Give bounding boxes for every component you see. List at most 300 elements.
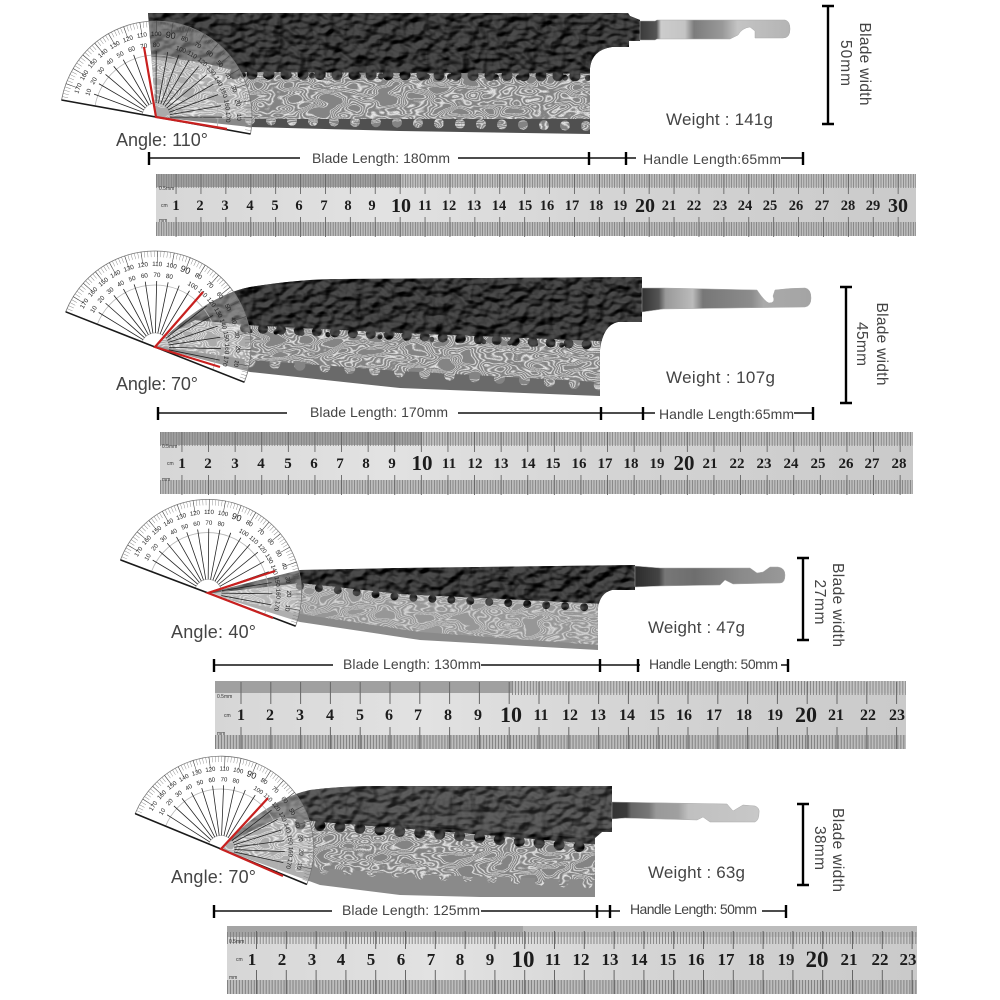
ruler 4: cm	[236, 957, 243, 963]
angle label 1: Angle: 110°	[116, 130, 208, 150]
blade width dimension 1: Blade width	[856, 22, 873, 106]
ruler 1: 17	[565, 198, 579, 214]
angle marker 4	[221, 798, 283, 876]
protractor 4: 40	[184, 783, 194, 792]
ruler 3: 10	[500, 702, 522, 727]
protractor 1: 130	[109, 40, 122, 51]
protractor 2: 50	[128, 275, 137, 284]
protractor 3: 140	[162, 517, 175, 528]
ruler 3: 2	[266, 707, 274, 724]
protractor 4: 50	[196, 779, 205, 787]
ruler 2: 26	[838, 456, 854, 472]
protractor 2	[66, 222, 280, 382]
protractor 2: 60	[140, 272, 149, 280]
ruler 4: 5	[367, 950, 375, 969]
protractor 3: 130	[263, 553, 275, 566]
protractor 4: 50	[287, 807, 297, 817]
protractor 4: 90	[245, 768, 258, 781]
ruler 2: mm	[162, 477, 170, 483]
protractor 1: 20	[233, 99, 241, 107]
protractor 4: 130	[277, 811, 288, 824]
protractor 3: 80	[244, 519, 254, 529]
ruler 4: 7	[427, 950, 436, 969]
protractor 2: 140	[109, 269, 122, 280]
protractor 4: 80	[232, 777, 241, 786]
protractor 3: 50	[181, 523, 190, 532]
protractor 1: 90	[165, 30, 177, 41]
blade length dimension 4	[214, 902, 786, 918]
protractor 1: 170	[73, 82, 84, 95]
blade width dimension 3: Blade width	[829, 563, 846, 647]
blade width dimension 1	[822, 6, 873, 124]
protractor 4: 30	[296, 835, 304, 843]
protractor 2: 10	[232, 359, 240, 368]
weight 4: Weight : 63g	[648, 863, 745, 882]
handle length label 4: Handle Length: 50mm	[630, 901, 757, 917]
protractor 2: 40	[116, 279, 126, 289]
blade width dimension 4: 38mm	[811, 826, 828, 870]
protractor 3: 120	[189, 509, 201, 518]
ruler 1: cm	[161, 203, 168, 209]
tang 2	[642, 288, 811, 312]
protractor 2: 160	[87, 286, 100, 299]
protractor 2: 110	[152, 261, 163, 268]
protractor 1: 60	[204, 49, 215, 59]
ruler 4: 1	[248, 950, 256, 969]
blade width dimension 4: Blade width	[829, 808, 846, 892]
protractor 4: 110	[219, 766, 230, 773]
protractor 1: 110	[186, 50, 198, 61]
ruler 3: 23	[889, 707, 905, 724]
ruler 1: 19	[613, 198, 627, 214]
protractor 1: 150	[87, 57, 99, 70]
handle length label 3: Handle Length: 50mm	[649, 656, 778, 672]
ruler 1: 20	[635, 195, 655, 217]
protractor 2: 20	[234, 346, 241, 353]
protractor 1: 170	[224, 112, 231, 123]
ruler 2: 10	[412, 451, 432, 475]
protractor 3: 30	[283, 576, 292, 585]
ruler 3: 21	[828, 707, 844, 724]
blade 1	[148, 13, 640, 134]
protractor 3: 110	[204, 509, 214, 516]
ruler 4: 10	[512, 947, 534, 972]
ruler 2: 4	[257, 456, 265, 472]
protractor 1: 60	[127, 45, 137, 54]
ruler 2: 11	[442, 456, 456, 472]
ruler 4: 20	[806, 947, 828, 972]
protractor 4: 20	[165, 797, 175, 807]
angle marker 1	[144, 47, 227, 129]
ruler 3: 18	[736, 707, 752, 724]
protractor 3	[120, 472, 329, 626]
ruler 1: 30	[888, 195, 908, 217]
ruler 3: 20	[795, 702, 817, 727]
ruler 3: 4	[326, 707, 334, 724]
ruler 4: 4	[337, 950, 346, 969]
panel: knife 1	[62, 6, 916, 236]
ruler 2: 5	[284, 456, 292, 472]
protractor 2: 20	[97, 294, 107, 305]
ruler 2: 7	[336, 456, 344, 472]
protractor 2: 140	[218, 318, 228, 331]
ruler 1: 24	[738, 198, 752, 214]
protractor 2: 160	[223, 344, 230, 355]
protractor 2: 60	[215, 291, 225, 301]
protractor 2: 130	[123, 264, 135, 274]
protractor 2: 70	[205, 280, 215, 290]
ruler 3: 3	[296, 707, 304, 724]
protractor 4: 60	[208, 776, 216, 784]
ruler 2: 18	[624, 456, 638, 472]
ruler 1: 25	[763, 198, 777, 214]
ruler 4: 8	[456, 950, 464, 969]
protractor 2: 120	[137, 261, 149, 270]
protractor 2: 110	[196, 287, 209, 300]
protractor 1	[62, 6, 267, 134]
protractor 1: 120	[196, 56, 209, 69]
protractor 3: 30	[159, 534, 169, 544]
ruler 1: 21	[662, 198, 676, 214]
protractor 4: 10	[158, 807, 168, 817]
blade 4	[223, 786, 612, 897]
ruler 1: 10	[391, 195, 411, 217]
ruler 3: 19	[767, 707, 783, 724]
protractor 4: 20	[297, 849, 304, 856]
angle marker 2	[155, 292, 220, 367]
protractor 1: 30	[229, 85, 238, 94]
ruler 2: 0.5mm	[162, 444, 177, 450]
angle marker 3	[208, 571, 275, 618]
protractor 1: 70	[193, 41, 203, 51]
ruler 4: 14	[630, 950, 648, 969]
protractor 4: 140	[178, 773, 191, 784]
ruler 1: 15	[518, 198, 532, 214]
ruler 3: 9	[474, 707, 482, 724]
protractor 1: 10	[235, 114, 242, 121]
protractor 1: 30	[96, 66, 107, 76]
weight 2: Weight : 107g	[666, 368, 775, 387]
ruler 2: 22	[730, 456, 744, 472]
protractor 2: 50	[223, 303, 232, 313]
protractor 4: 40	[293, 821, 302, 830]
protractor 2: 90	[179, 263, 192, 276]
ruler 2: 19	[650, 456, 664, 472]
ruler 2: 1	[178, 456, 186, 472]
handle length label 1: Handle Length:65mm	[643, 151, 781, 167]
panel: knife 2	[66, 222, 913, 494]
ruler 4: 16	[688, 950, 704, 969]
ruler 1: 23	[713, 198, 727, 214]
protractor 3: 160	[141, 534, 153, 547]
ruler 2: 20	[674, 451, 694, 475]
ruler 4: 12	[572, 950, 590, 969]
protractor 1: 80	[153, 42, 160, 49]
protractor 3: 70	[205, 520, 213, 527]
protractor 4: 170	[284, 858, 293, 870]
ruler 4: 9	[486, 950, 494, 969]
handle length label 2: Handle Length:65mm	[659, 406, 794, 422]
blade width dimension 4	[797, 804, 846, 892]
ruler 2: 28	[892, 456, 906, 472]
protractor 2: 100	[166, 262, 178, 271]
protractor 4: 160	[156, 789, 168, 801]
ruler 2: 17	[598, 456, 613, 472]
protractor 2: 170	[79, 297, 91, 310]
ruler 2: 9	[388, 456, 396, 472]
blade 3	[211, 565, 635, 650]
protractor 3: 150	[151, 524, 164, 537]
protractor 2: 40	[229, 316, 238, 326]
ruler 1: 29	[866, 198, 880, 214]
blade length dimension 2	[158, 404, 813, 420]
protractor 1: 140	[212, 75, 224, 88]
ruler 2: 6	[310, 456, 318, 472]
ruler 3: 16	[676, 707, 692, 724]
ruler 1: 28	[841, 198, 855, 214]
blade width dimension 3: 27mm	[811, 580, 828, 624]
ruler 4: 15	[660, 950, 676, 969]
protractor 3: 170	[133, 545, 145, 558]
weight 1: Weight : 141g	[666, 110, 773, 129]
ruler 3: cm	[224, 713, 231, 719]
protractor 4: 120	[205, 766, 217, 774]
blade width dimension 3	[797, 558, 846, 647]
protractor 2: 130	[212, 307, 224, 320]
protractor 1: 140	[97, 47, 110, 60]
protractor 1: 160	[222, 99, 231, 111]
protractor 2: 70	[153, 272, 161, 279]
protractor 3: 140	[269, 564, 279, 576]
protractor 4: 70	[270, 785, 280, 795]
blade width dimension 2: Blade width	[873, 302, 890, 386]
protractor 4: 130	[191, 768, 203, 778]
ruler 2: 8	[362, 456, 370, 472]
blade 2	[157, 277, 642, 396]
ruler 1: mm	[159, 218, 167, 224]
protractor 3: 120	[256, 543, 268, 555]
protractor 2: 10	[89, 304, 99, 314]
ruler 1: 26	[789, 198, 803, 214]
blade length dimension 1	[149, 150, 803, 166]
blade length dimension 2: Blade Length: 170mm	[310, 404, 448, 420]
protractor 3: 170	[272, 600, 281, 612]
tang 3	[635, 566, 785, 587]
blade width dimension 2	[840, 287, 890, 403]
protractor 3: 160	[274, 589, 281, 600]
ruler 4: 2	[278, 950, 286, 969]
protractor 3: 40	[169, 527, 179, 537]
protractor 3: 90	[230, 511, 243, 524]
protractor 3: 100	[237, 527, 250, 539]
ruler 1: 13	[467, 198, 481, 214]
ruler 3: 6	[385, 707, 393, 724]
protractor 2: 150	[221, 331, 230, 343]
ruler 2: 15	[546, 456, 560, 472]
protractor 1: 150	[218, 87, 229, 99]
ruler 1: 22	[687, 198, 701, 214]
ruler 1	[156, 174, 916, 236]
ruler 1: 18	[589, 198, 603, 214]
ruler 4: 23	[900, 950, 916, 969]
protractor 1: 50	[214, 59, 225, 70]
protractor 4: 120	[270, 801, 282, 813]
protractor 3: 110	[247, 534, 260, 546]
angle label 3: Angle: 40°	[171, 622, 256, 642]
ruler 2: 14	[520, 456, 536, 472]
angle label 2: Angle: 70°	[116, 374, 198, 394]
protractor 4: 170	[148, 800, 160, 812]
ruler 4: 19	[778, 950, 794, 969]
ruler 2: 27	[864, 456, 880, 472]
ruler 3: 0.5mm	[217, 694, 232, 700]
protractor 3: 10	[143, 552, 153, 562]
protractor 1: 100	[175, 45, 187, 55]
protractor 2: 30	[106, 286, 116, 296]
ruler 3: 14	[619, 707, 635, 724]
protractor 4: 160	[286, 847, 294, 858]
ruler 4: 11	[545, 950, 561, 969]
ruler 1: 5	[271, 198, 279, 214]
ruler 4: 0.5mm	[229, 939, 244, 945]
ruler 3: 22	[860, 707, 876, 724]
protractor 2: 170	[220, 355, 230, 368]
ruler 3: 8	[444, 707, 452, 724]
protractor 3: 70	[256, 527, 266, 537]
protractor 3: 100	[217, 510, 229, 518]
protractor 4: 10	[295, 862, 303, 871]
ruler 1: 4	[246, 198, 254, 214]
protractor 4: 150	[285, 834, 294, 846]
protractor 3: 20	[285, 591, 292, 598]
ruler 1: 3	[221, 198, 229, 214]
protractor 1: 50	[116, 50, 126, 60]
protractor 4: 60	[279, 795, 289, 806]
ruler 3: 12	[562, 707, 578, 724]
blade width dimension 1: 50mm	[837, 40, 854, 86]
protractor 1: 100	[151, 31, 162, 38]
protractor 4: 100	[252, 785, 265, 797]
ruler 3: 15	[649, 707, 665, 724]
ruler 4: 6	[397, 950, 405, 969]
protractor 2: 150	[97, 276, 110, 288]
protractor 3: 10	[283, 604, 291, 613]
ruler 2: 25	[810, 456, 826, 472]
protractor 3: 80	[217, 520, 226, 529]
ruler 3: 5	[356, 707, 364, 724]
ruler 4: 13	[602, 950, 618, 969]
protractor 1: 130	[205, 65, 217, 78]
protractor 3: 50	[273, 549, 283, 559]
ruler 4: 18	[748, 950, 764, 969]
protractor 1: 20	[89, 76, 99, 86]
protractor 2: 100	[186, 280, 199, 292]
protractor 4: 100	[232, 767, 244, 776]
ruler 3	[215, 681, 906, 749]
protractor 1: 110	[136, 31, 148, 40]
protractor 1: 70	[140, 42, 148, 51]
protractor 1: 40	[105, 57, 116, 67]
protractor 3: 60	[265, 537, 276, 547]
ruler 4: 22	[872, 950, 888, 969]
panel: knife 4	[134, 756, 917, 994]
angle label 4: Angle: 70°	[171, 867, 256, 887]
ruler 2: 2	[204, 456, 212, 472]
protractor 4: 140	[282, 822, 292, 835]
protractor 1: 10	[84, 87, 94, 97]
blade length dimension 3: Blade Length: 130mm	[343, 656, 481, 672]
protractor 2: 120	[205, 296, 217, 309]
ruler 2: 12	[468, 456, 482, 472]
protractor 4: 30	[174, 789, 184, 799]
ruler 1: 11	[418, 198, 432, 214]
protractor 1: 80	[180, 35, 189, 44]
protractor 2: 80	[165, 273, 174, 281]
ruler 2: 23	[756, 456, 772, 472]
ruler 3: 1	[237, 707, 245, 724]
protractor 4: 150	[166, 780, 179, 792]
protractor 3: 40	[280, 562, 289, 571]
ruler 2	[160, 432, 913, 494]
ruler 3: mm	[217, 731, 225, 737]
ruler 4: 17	[718, 950, 735, 969]
ruler 1: 14	[492, 198, 506, 214]
ruler 3: 11	[533, 707, 549, 724]
ruler 3: 13	[590, 707, 606, 724]
protractor 4	[135, 728, 342, 884]
protractor 3: 60	[193, 520, 201, 528]
ruler 2: 3	[231, 456, 239, 472]
blade length dimension 4: Blade Length: 125mm	[342, 902, 480, 918]
protractor 3: 20	[150, 542, 160, 552]
ruler 1: 16	[540, 198, 554, 214]
ruler 1: 9	[368, 198, 376, 214]
protractor 1: 120	[122, 34, 135, 44]
protractor 3: 130	[175, 512, 188, 522]
ruler 4: mm	[229, 975, 237, 981]
ruler 3: 7	[414, 707, 422, 724]
protractor 4: 110	[262, 792, 274, 804]
ruler 4: 21	[840, 950, 858, 969]
ruler 2: 13	[494, 456, 508, 472]
ruler 4	[227, 926, 917, 994]
ruler 1: 7	[320, 198, 328, 214]
ruler 2: cm	[167, 461, 174, 467]
ruler 1: 0.5mm	[159, 186, 174, 192]
protractor 4: 70	[220, 776, 228, 784]
ruler 2: 21	[702, 456, 718, 472]
protractor 4: 80	[259, 777, 269, 787]
ruler 2: 24	[784, 456, 799, 472]
ruler 2: 16	[572, 456, 587, 472]
protractor 3: 150	[273, 576, 281, 588]
protractor 1: 40	[223, 71, 233, 81]
ruler 1: 2	[196, 198, 204, 214]
blade length dimension 1: Blade Length: 180mm	[312, 150, 450, 166]
blade width dimension 2: 45mm	[853, 322, 870, 366]
protractor 2: 30	[233, 331, 241, 339]
blade length dimension 3	[214, 656, 788, 672]
ruler 3: 17	[706, 707, 722, 724]
ruler 1: 6	[295, 198, 303, 214]
tang 4	[612, 802, 759, 822]
ruler 4: 3	[308, 950, 316, 969]
ruler 1: 12	[442, 198, 456, 214]
ruler 1: 1	[172, 198, 180, 214]
protractor 1: 160	[79, 69, 91, 82]
ruler 1: 27	[815, 198, 829, 214]
ruler 1: 8	[344, 198, 352, 214]
